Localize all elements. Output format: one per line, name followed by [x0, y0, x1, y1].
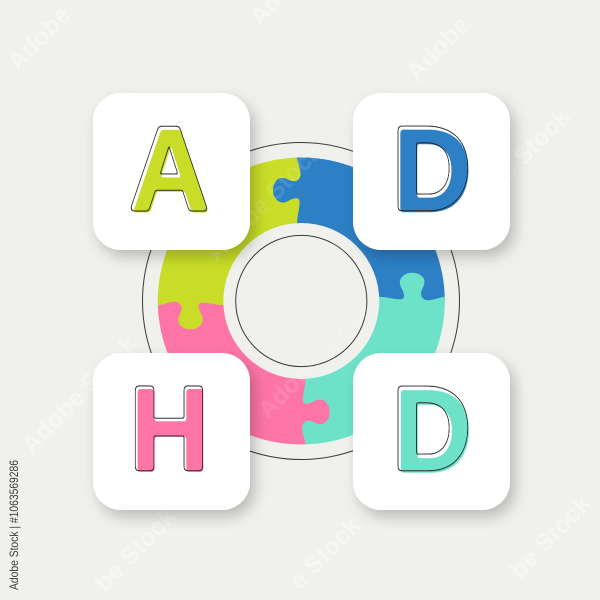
piece: yellow-green — [158, 158, 301, 330]
watermarks: Adobe Stock — [449, 103, 576, 232]
letter D: D — [394, 106, 472, 237]
watermarks: Adobe — [401, 11, 475, 86]
stock credit: Adobe Stock | #1063569286 — [7, 460, 21, 590]
watermarks: e Stock — [284, 512, 366, 595]
watermarks over ring: Adobe Stock — [252, 295, 379, 424]
letter A: A — [129, 104, 209, 235]
letter H: H — [129, 363, 209, 495]
letter H: H — [131, 365, 210, 497]
letter A: A — [131, 106, 211, 237]
card: D blue — [353, 93, 510, 250]
piece: blue — [302, 158, 445, 301]
piece: teal — [302, 272, 445, 444]
card: H — [93, 353, 250, 510]
letter D: D — [394, 366, 473, 498]
watermarks: be Stock — [89, 503, 182, 597]
watermarks: be Stock — [504, 490, 597, 584]
puzzle ring — [158, 158, 445, 444]
watermarks over ring: Adobe Stock — [201, 138, 328, 267]
watermarks over ring — [201, 138, 379, 424]
card: A — [93, 93, 250, 250]
piece: pink — [158, 301, 330, 444]
centre circle — [223, 223, 379, 379]
card: D teal — [353, 353, 510, 510]
watermarks: Adobe Stock — [16, 330, 143, 459]
letter D: D — [392, 363, 471, 495]
watermarks: Adobe — [2, 1, 76, 76]
outer ring outline — [142, 142, 460, 460]
letter D: D — [392, 103, 471, 235]
blue knob over yellow-green — [273, 158, 340, 224]
